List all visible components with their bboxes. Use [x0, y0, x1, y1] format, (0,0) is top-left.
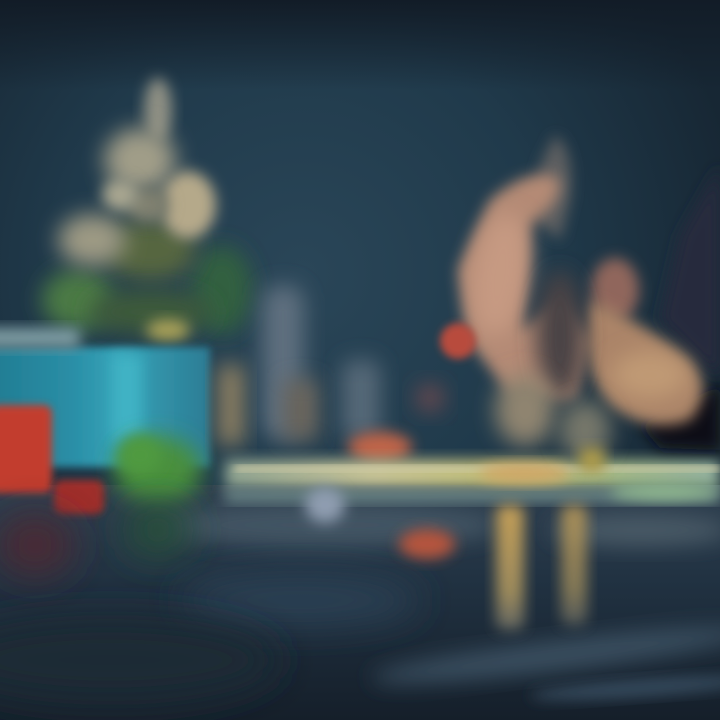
orange markers	[348, 384, 444, 462]
green shrub	[114, 435, 202, 556]
red fingertip	[440, 323, 476, 359]
hand	[458, 135, 702, 460]
dark sleeve	[640, 165, 720, 450]
rainbow band	[225, 460, 720, 502]
yellow legs	[496, 448, 604, 630]
tan column	[218, 365, 244, 445]
red block	[0, 405, 104, 514]
plant foliage	[42, 220, 252, 334]
blue box	[0, 328, 210, 467]
white reflection	[305, 487, 345, 523]
yellow flower accent	[146, 319, 190, 341]
grey buildings	[262, 285, 380, 440]
orange reflection	[399, 529, 455, 559]
plant beige bloom	[58, 78, 216, 266]
red reflection	[0, 513, 75, 577]
floor surface	[0, 485, 720, 720]
